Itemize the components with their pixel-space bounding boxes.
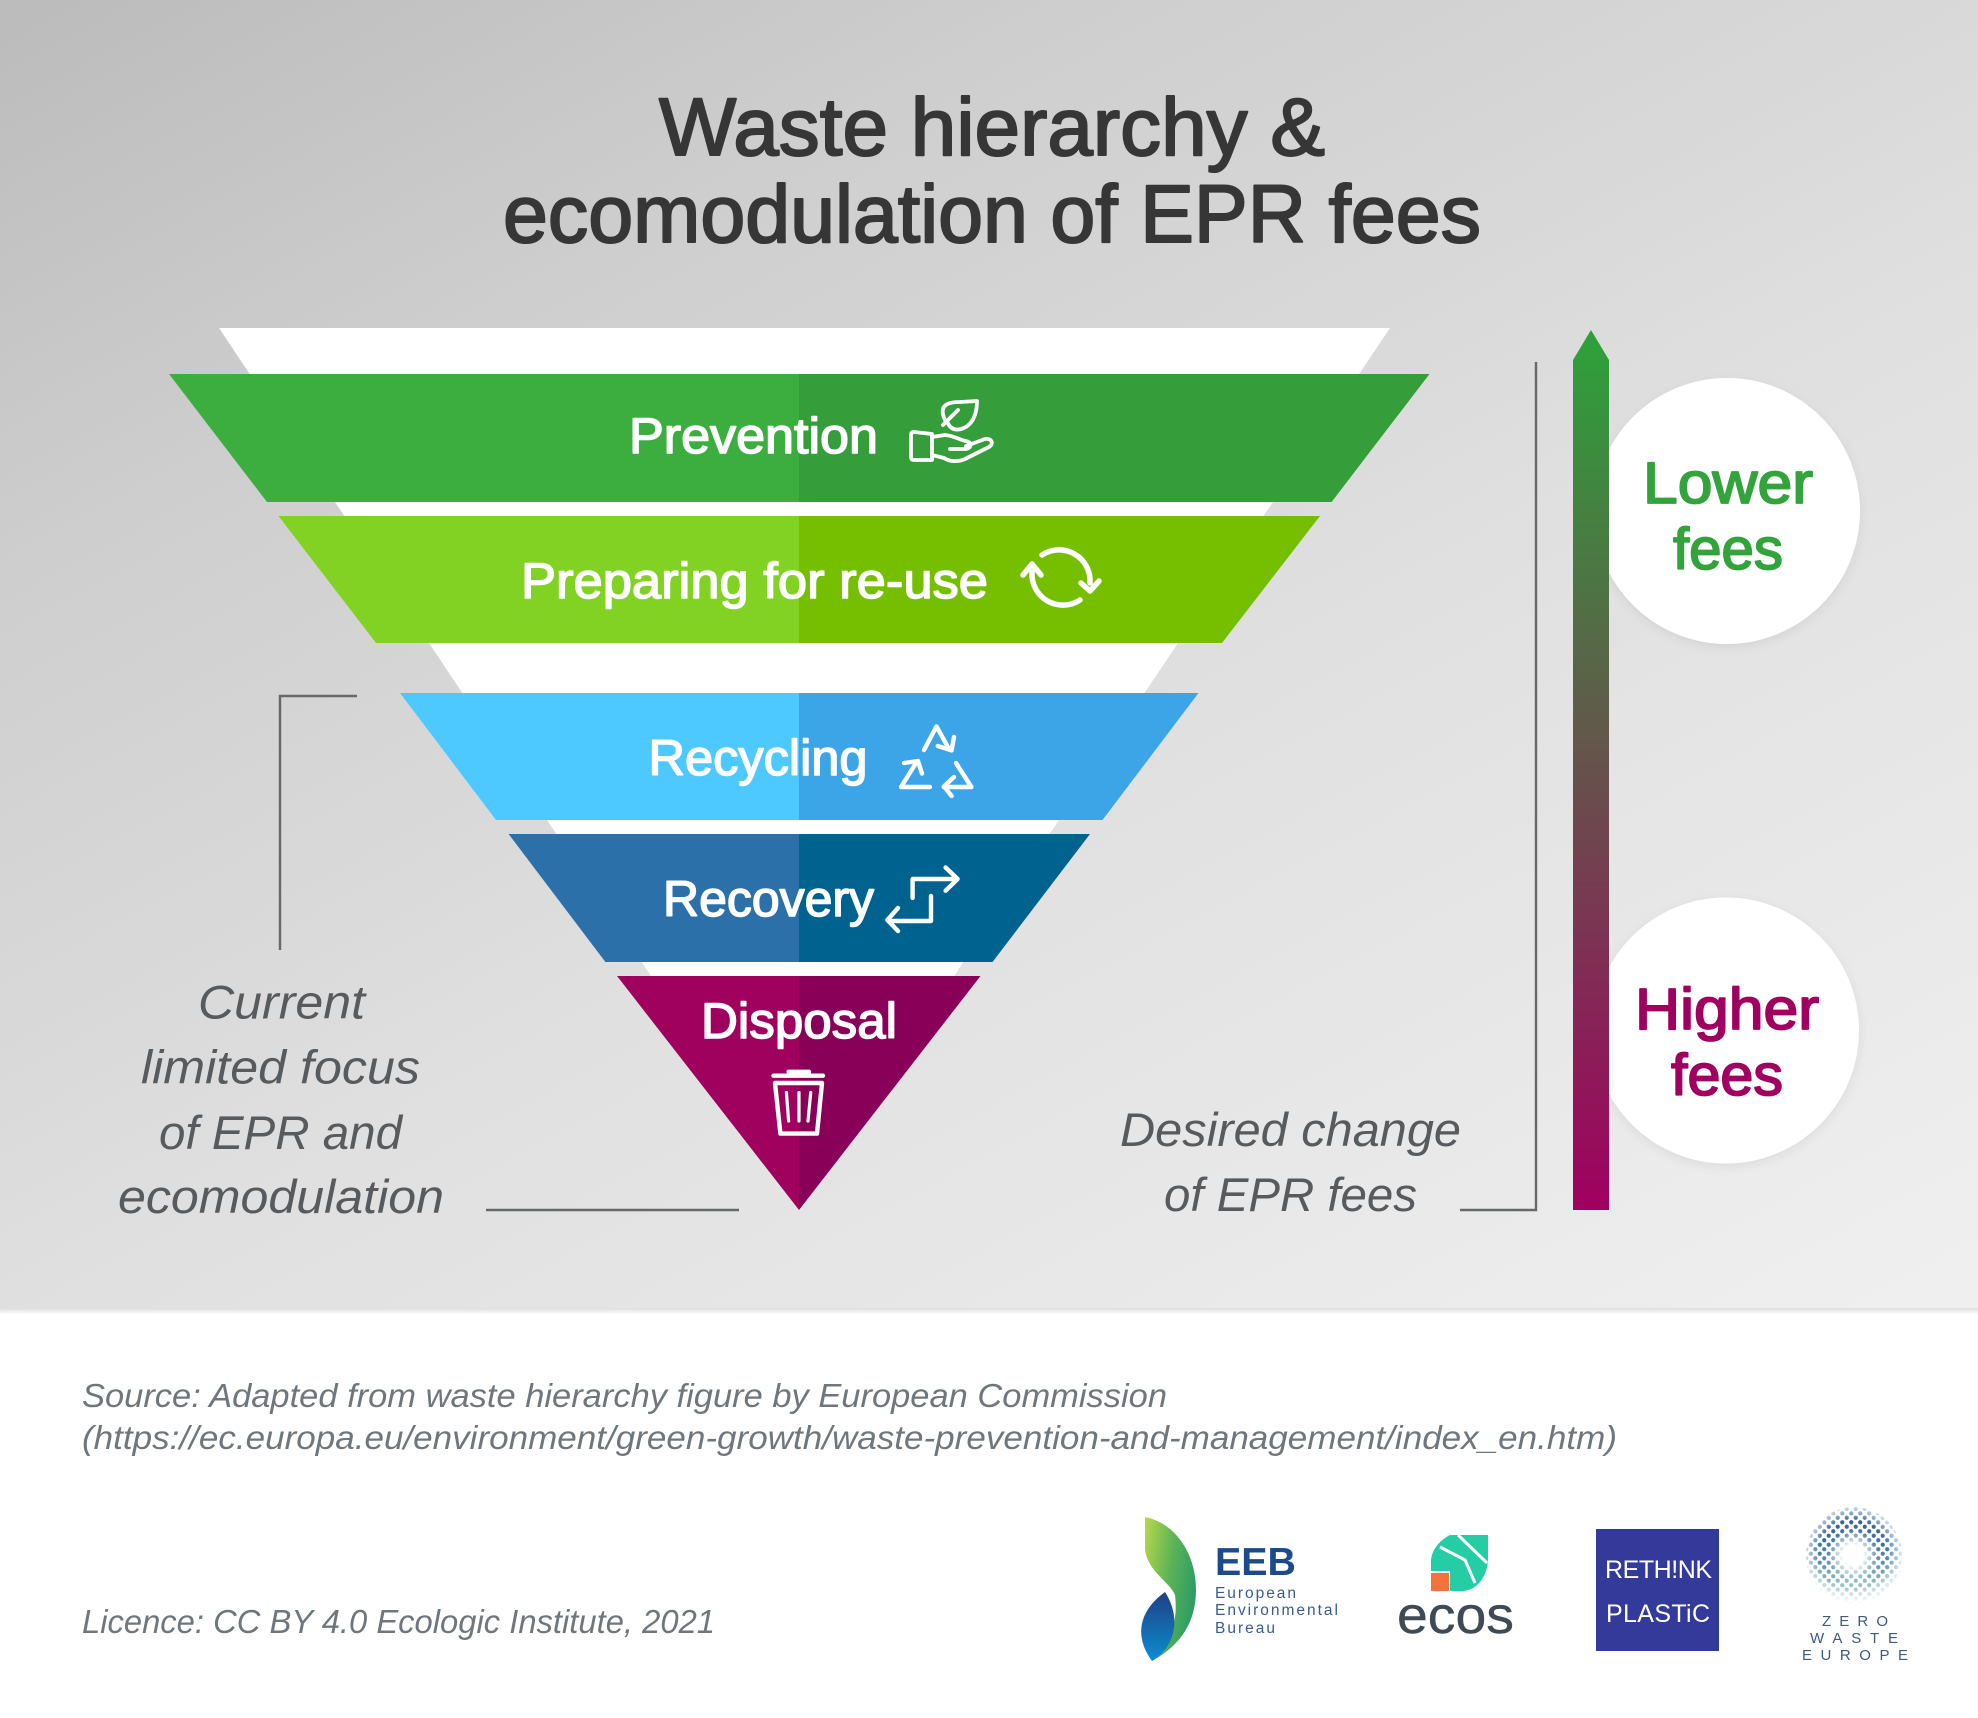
logo: Rethink Plastic: RETH!NK bbox=[1605, 1556, 1712, 1584]
logo: EEB: EEB bbox=[1215, 1541, 1296, 1584]
text: current limited focus: of EPR and bbox=[159, 1106, 404, 1159]
text: current limited focus: ecomodulation bbox=[118, 1170, 444, 1223]
pyramid tier: Recovery: Recovery bbox=[663, 871, 874, 927]
circle: higher fees: Higher bbox=[1635, 977, 1819, 1042]
licence text: Licence: CC BY 4.0 Ecologic Institute, 2021 bbox=[82, 1603, 715, 1640]
pyramid tier: Preparing for re-use bbox=[278, 516, 1320, 643]
circle: lower fees: Lower bbox=[1643, 451, 1813, 516]
logo: Zero Waste Europe: ZERO bbox=[1822, 1613, 1888, 1630]
logo: EEB: Bureau bbox=[1215, 1620, 1275, 1637]
pyramid tier: Disposal: Disposal bbox=[701, 993, 897, 1049]
logo: Rethink Plastic: PLASTiC bbox=[1606, 1600, 1710, 1628]
pyramid tier: Recycling bbox=[400, 693, 1198, 820]
title bbox=[503, 82, 1481, 260]
logo: EEB bbox=[1141, 1517, 1338, 1661]
pyramid tier: Preparing for re-use: Preparing for re-use bbox=[521, 553, 988, 609]
text: current limited focus: Current bbox=[198, 976, 367, 1029]
source text: (https://ec.europa.eu/environment/green-growth/waste-prevention-and-management/index_en.htm) bbox=[82, 1419, 1617, 1456]
pyramid tier: Recycling: Recycling bbox=[648, 730, 868, 786]
logo: ecos: ecos bbox=[1397, 1587, 1514, 1645]
icon: hand with leaf bbox=[911, 401, 992, 461]
circle: higher fees bbox=[1593, 898, 1859, 1164]
logo: EEB: Environmental bbox=[1215, 1602, 1338, 1619]
title: Waste hierarchy & bbox=[659, 82, 1325, 173]
icon: exchange arrows bbox=[887, 868, 958, 931]
pyramid tier: Prevention: Prevention bbox=[629, 408, 878, 464]
circle: higher fees: fees bbox=[1671, 1043, 1783, 1108]
text: current limited focus bbox=[118, 976, 444, 1223]
source text: Source: Adapted from waste hierarchy figure by European Commission bbox=[82, 1377, 1167, 1414]
icon: circular arrows bbox=[1023, 550, 1099, 605]
icon: recycling triangle bbox=[901, 726, 971, 796]
icon: trash bin bbox=[774, 1072, 823, 1134]
bracket line: current focus bbox=[280, 696, 739, 1210]
white inverted pyramid backdrop bbox=[219, 328, 1390, 976]
title: ecomodulation of EPR fees bbox=[503, 169, 1481, 260]
text: desired change bbox=[1120, 1103, 1461, 1221]
pyramid tier: Disposal bbox=[617, 976, 980, 1210]
logo: ecos bbox=[1397, 1535, 1514, 1645]
text: desired change: Desired change bbox=[1120, 1103, 1461, 1156]
background panel bbox=[0, 0, 1978, 1308]
circle: lower fees: fees bbox=[1673, 517, 1783, 582]
pyramid tier: Prevention bbox=[169, 374, 1430, 502]
logo: Zero Waste Europe bbox=[1802, 1505, 1908, 1664]
bracket line: desired change bbox=[1460, 362, 1536, 1210]
pyramid tier: Recovery bbox=[509, 834, 1090, 962]
logo: EEB: European bbox=[1215, 1585, 1296, 1602]
logo: Zero Waste Europe: EUROPE bbox=[1802, 1647, 1908, 1664]
arrow: fee gradient bbox=[1573, 330, 1609, 1210]
logo: Zero Waste Europe: WASTE bbox=[1810, 1630, 1898, 1647]
text: current limited focus: limited focus bbox=[141, 1041, 420, 1094]
source text bbox=[82, 1377, 1617, 1456]
circle: lower fees bbox=[1594, 378, 1860, 644]
text: desired change: of EPR fees bbox=[1164, 1168, 1417, 1221]
logo: Rethink Plastic bbox=[1596, 1529, 1719, 1651]
